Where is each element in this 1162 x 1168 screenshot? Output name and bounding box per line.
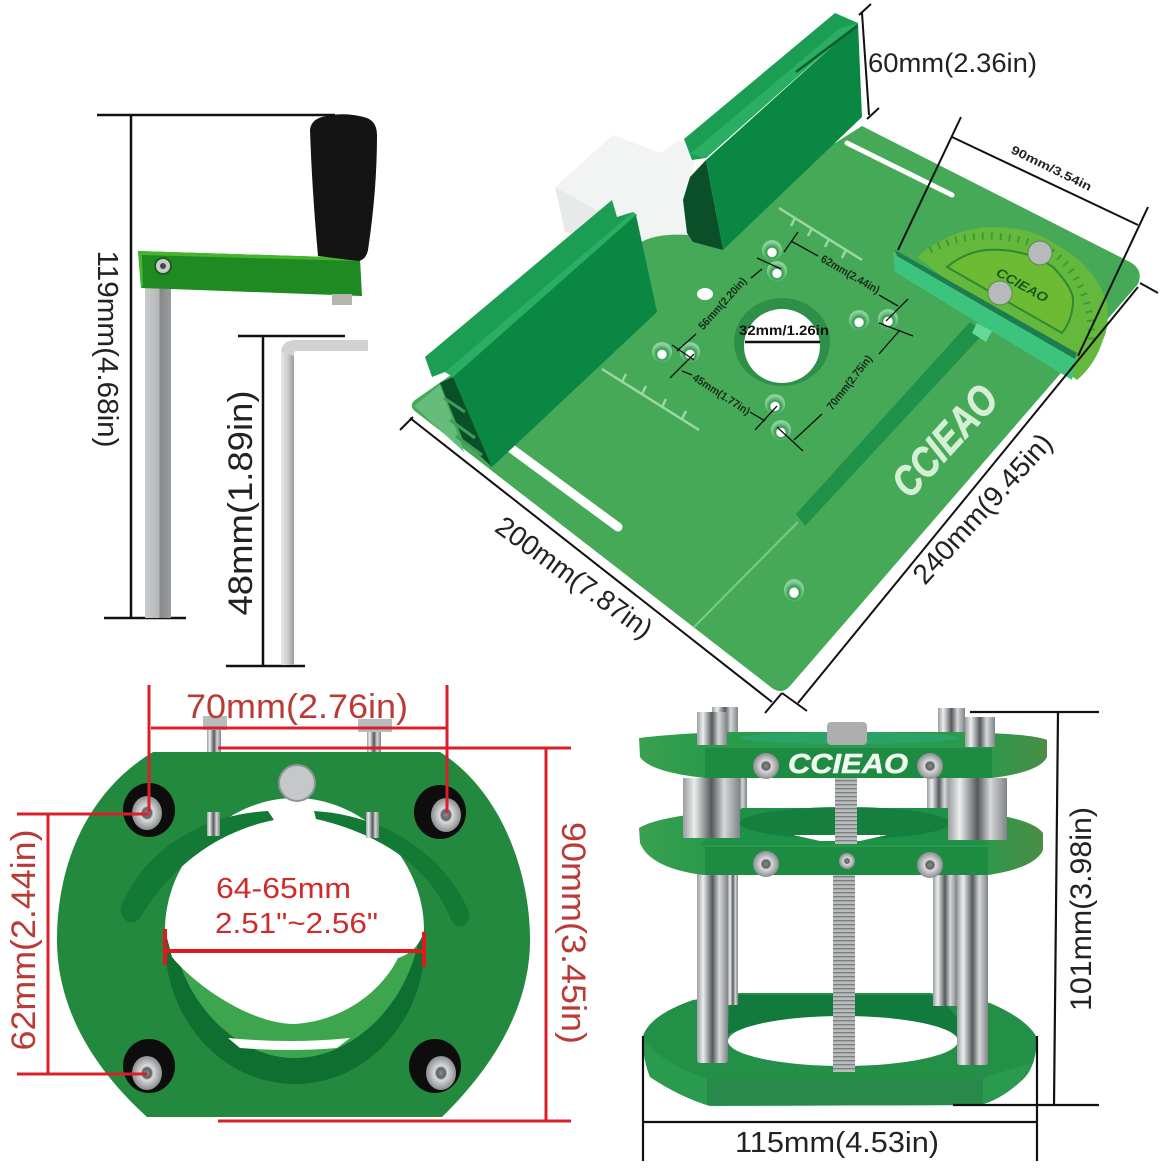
green base plate bbox=[412, 126, 1140, 691]
stand bolts bbox=[753, 753, 943, 878]
plate length label: 240mm(9.45in) bbox=[906, 427, 1059, 590]
hole dimension labels: 56mm(2.20in) bbox=[696, 275, 750, 332]
collar width label: 70mm(2.76in) bbox=[186, 688, 408, 726]
collar bottom slit bbox=[228, 1038, 350, 1050]
crank height dimension lines bbox=[97, 115, 335, 618]
collar bore line bbox=[165, 929, 425, 967]
panel: crank handle bbox=[91, 114, 377, 618]
collar body bbox=[57, 752, 530, 1117]
collar bore label bbox=[215, 873, 378, 940]
crank hex shaft bbox=[145, 288, 171, 618]
hex key bbox=[281, 340, 368, 665]
white router block bbox=[555, 135, 695, 245]
hole dimension labels: 45mm(1.77in) bbox=[690, 372, 752, 418]
plate width label: 200mm(7.87in) bbox=[490, 510, 659, 644]
hole dimension labels bbox=[690, 253, 882, 418]
stand base plate bbox=[643, 993, 1036, 1106]
rear fence bbox=[683, 13, 862, 250]
collar center bolt bbox=[279, 765, 315, 801]
bore diameter line bbox=[745, 341, 820, 343]
stand logo: CCIEAO bbox=[788, 748, 908, 779]
plate dimension lines bbox=[400, 4, 1158, 713]
protractor: CCIEAO bbox=[994, 265, 1051, 305]
collar top screws bbox=[203, 716, 392, 752]
hole dimension labels: 62mm(2.44in) bbox=[818, 253, 882, 297]
bore diameter label: 32mm/1.26in bbox=[739, 322, 829, 338]
panel: router collar top view bbox=[5, 685, 592, 1121]
collar dimension lines bbox=[17, 685, 571, 1121]
channel groove bbox=[796, 322, 984, 526]
stand threaded rod upper bbox=[835, 778, 857, 844]
panel: router lift stand bbox=[639, 707, 1099, 1161]
stand upper front studs bbox=[697, 712, 995, 747]
center router hole bbox=[734, 298, 830, 386]
hex key dimension lines bbox=[226, 336, 345, 666]
crank arm bbox=[138, 251, 362, 305]
hole dimension labels: 70mm(2.75in) bbox=[825, 353, 875, 413]
collar white opening bbox=[165, 798, 424, 1024]
protractor T-bar bbox=[893, 250, 1077, 380]
stand front lower rods bbox=[697, 870, 988, 1065]
collar bore label: 64-65mm bbox=[216, 873, 351, 905]
collar bore label: 2.51"~2.56" bbox=[215, 908, 378, 940]
panel: router table plate bbox=[400, 4, 1158, 713]
stand middle plate bbox=[639, 807, 1043, 875]
stand top plate bbox=[639, 732, 1047, 778]
ruler scale upper bbox=[779, 208, 862, 260]
ruler scale lower bbox=[602, 369, 699, 430]
hex key label: 48mm(1.89in) bbox=[222, 390, 260, 616]
front fence bbox=[425, 200, 657, 467]
stand width label: 115mm(4.53in) bbox=[735, 1127, 939, 1159]
collar inner opening bbox=[165, 800, 425, 1084]
stand upper thick rods bbox=[683, 778, 1007, 840]
small hole dimension lines bbox=[670, 232, 913, 451]
collar height label: 90mm(3.45in) bbox=[554, 822, 592, 1044]
stand height label: 101mm(3.98in) bbox=[1065, 807, 1098, 1011]
plate logo: CCIEAO bbox=[882, 375, 1007, 506]
crank height label: 119mm(4.68in) bbox=[91, 251, 123, 447]
stand threaded rod lower bbox=[833, 874, 855, 1072]
panel: hex key bbox=[222, 336, 368, 666]
fence height label: 60mm(2.36in) bbox=[868, 48, 1037, 78]
collar bolts with black washers bbox=[123, 783, 466, 1093]
collar inner screws bbox=[207, 812, 379, 838]
stand lead screw head bbox=[827, 722, 867, 745]
lower plate slot bbox=[512, 449, 618, 527]
protractor width label: 90mm/3.54in bbox=[1009, 143, 1094, 194]
right step edge bbox=[694, 522, 798, 627]
collar hole spacing label: 62mm(2.44in) bbox=[5, 830, 43, 1050]
stand dimension lines bbox=[643, 712, 1099, 1161]
left crescent slot bbox=[121, 811, 274, 922]
right crescent slot bbox=[314, 811, 469, 927]
plate corner under front fence bbox=[414, 385, 464, 452]
stand rear rods bbox=[712, 707, 965, 1006]
crank black knob bbox=[310, 114, 377, 261]
collar inner ring highlight bbox=[172, 930, 420, 1058]
protractor bbox=[917, 227, 1108, 380]
top plate slot bbox=[847, 143, 952, 195]
mounting holes bbox=[652, 240, 898, 601]
